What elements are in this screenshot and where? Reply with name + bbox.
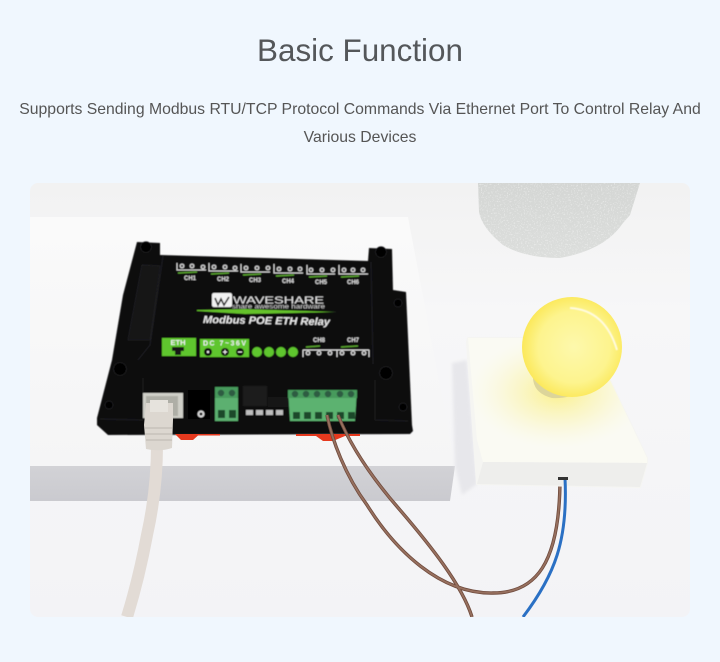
relay module: [97, 242, 413, 435]
lower terminals: [303, 346, 369, 357]
shadow beside block: [452, 360, 477, 495]
white block: [30, 466, 455, 501]
waveshare logo: [197, 293, 337, 314]
dc jack: [188, 390, 210, 419]
brown wires to relay: [327, 415, 560, 617]
yellow bulb: [522, 297, 622, 398]
channel labels: CH3: [249, 278, 262, 284]
board cavity: [142, 378, 376, 421]
terminal brackets: [177, 263, 368, 274]
background surface: [30, 183, 690, 268]
ETH label: ETH: [170, 338, 186, 347]
ETH label: [162, 338, 196, 356]
ethernet plug: [144, 400, 173, 450]
DC label: DC 7~36V: [203, 340, 246, 348]
right post edge: [100, 378, 408, 421]
board indicators: [246, 410, 283, 415]
green relay terminal: [288, 390, 357, 421]
terminal screws: [180, 264, 365, 272]
status LEDs: [252, 347, 298, 357]
board area: [243, 386, 288, 407]
module body: [97, 242, 413, 435]
ethernet cable: [127, 445, 157, 617]
channel labels: CH7: [347, 338, 360, 344]
left flange edge: [138, 256, 373, 364]
channel labels: [184, 276, 360, 344]
left flange recess: [128, 265, 160, 340]
product name: Modbus POE ETH Relay: [203, 314, 331, 328]
subtitle text: Various Devices: [304, 129, 416, 146]
channel labels: CH6: [347, 280, 360, 286]
light glow: [485, 352, 624, 438]
concrete cylinder: [478, 183, 640, 258]
ethernet port: [142, 392, 184, 419]
waveshare logo: WAVESHARE: [233, 296, 324, 306]
subtitle text: [19, 101, 701, 146]
DC label: [200, 339, 249, 357]
front ledge: [138, 360, 378, 380]
channel labels: CH2: [217, 277, 230, 283]
orange clips: [175, 434, 360, 441]
green power terminal: [215, 387, 238, 421]
channel labels: CH8: [313, 338, 326, 344]
channel labels: CH5: [315, 280, 328, 286]
white light base: [474, 448, 647, 487]
product photo panel: [30, 183, 690, 617]
channel labels: CH1: [184, 276, 197, 282]
subtitle text: Supports Sending Modbus RTU/TCP Protocol Commands Via Ethernet Port To Control Relay And: [19, 101, 701, 118]
channel labels: CH4: [282, 279, 295, 285]
title: Basic Function: [257, 33, 463, 68]
blue and brown wires from base: [523, 477, 568, 617]
waveshare logo: share awesome hardware: [232, 304, 326, 310]
mounting holes: [105, 242, 407, 411]
relay symbols: [178, 272, 359, 277]
